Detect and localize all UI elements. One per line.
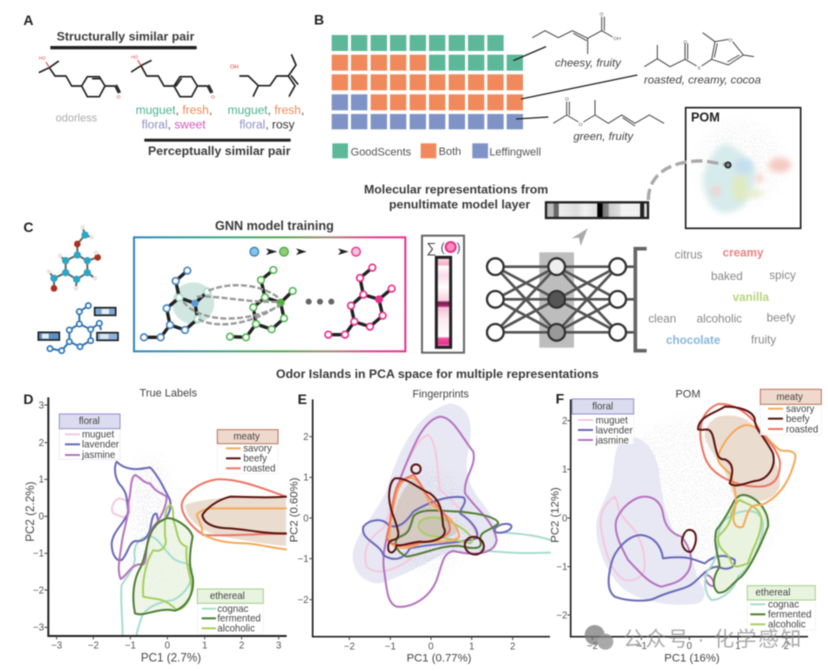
panel F: POM PCA [550,388,821,665]
molecule: rosy: OH [230,64,238,70]
legend [332,143,541,159]
axes: −3 [33,623,44,634]
axes: 0 [687,641,692,652]
axes: −1 [385,641,396,652]
heading: GNN model training: GNN model training [215,219,334,233]
axes [288,399,550,665]
waffle chart [332,35,523,129]
molecule: roasted, creamy, cocoa: S [697,65,701,71]
molecule: green, fruity: O [565,97,569,103]
legend: ethereal [197,589,263,635]
legend: ethereal: ethereal [756,588,790,599]
axes: 1 [202,640,207,651]
molecule: green, fruity: O [579,122,583,128]
panel letter B: B [314,12,324,28]
penultimate layer highlight [539,252,574,348]
legend: meaty: beefy [786,414,810,425]
molecule: muguet fresh floral sweet: O [211,95,215,101]
axes: 1 [469,641,474,652]
odor word cloud: citrus [675,248,703,261]
molecule: odorless: HO [39,55,46,60]
representation vector [546,202,648,218]
heading: structurally similar pair [50,30,197,49]
axes: −1 [298,554,309,565]
axes: PC1 (16%) [664,653,720,665]
axes: 1 [735,641,741,652]
watermark: 公众号 · 化学感知 [623,628,801,651]
upward arrow [572,228,588,246]
legend: ethereal: alcoholic [768,620,806,631]
legend: ethereal: cognac [217,604,249,615]
molecule: muguet fresh floral sweet [131,54,215,101]
axes: PC2 (0.60%) [288,477,300,542]
molecule: rosy [230,55,298,96]
axes: 0 [39,512,44,523]
legend: meaty: savory [786,404,815,415]
legend: ethereal: cognac [768,600,799,611]
axes: 2 [303,432,309,443]
legend: floral: muguet [82,430,115,441]
molecule: cheesy, fruity [532,11,621,54]
label: cheesy, fruity: cheesy, fruity [555,58,622,70]
label: muguet, fresh, floral, rosy [228,103,304,132]
molecule: roasted, creamy, cocoa: O [683,39,687,45]
label: roasted, creamy, cocoa: roasted, creamy, cocoa [644,74,761,86]
chart title: Fingerprints [413,388,469,400]
legend: floral: floral [79,416,100,427]
odor word cloud: clean [648,313,676,326]
heading: structurally similar pair: Structurally similar pair [57,30,195,44]
panel letter D: D [23,391,33,407]
axes: −1 [636,641,647,652]
molecule: odorless: O [117,94,121,100]
axes: 0 [428,641,434,652]
legend: ethereal: fermented [217,614,261,625]
label: green, fruity: green, fruity [573,131,634,143]
odor word cloud: creamy [723,246,764,259]
panel D: true labels PCA [23,388,287,665]
axes: 2 [784,641,789,652]
legend: ethereal: ethereal [210,591,245,602]
molecule: roasted, creamy, cocoa: O [728,38,732,44]
graph 2 [227,267,296,341]
legend: ethereal: fermented [768,610,811,621]
label: muguet, fresh, floral, sweet [136,103,212,132]
readout box: ( [441,241,445,255]
ethereal density [714,495,768,593]
legend: floral [572,399,634,446]
legend: meaty: meaty [777,392,803,403]
molecule: cheesy, fruity: O [600,11,604,17]
molecule: green, fruity [553,97,664,128]
heading: molecular representations: penultimate model layer [389,198,530,212]
ethereal density [420,517,457,537]
legend: ethereal: alcoholic [217,624,255,635]
axes: −2 [33,585,44,596]
axes: −1 [125,640,136,651]
floral density [596,437,705,605]
axes: −2 [88,640,99,651]
legend: meaty: meaty [234,431,260,442]
axes: 2 [562,416,567,427]
chart title: True Labels [140,388,198,400]
odor word cloud: fruity [751,333,776,346]
ethereal density [133,518,193,614]
axes: 2 [510,641,515,652]
panel C: model pipeline [23,219,464,353]
molecule: muguet fresh floral sweet: HO [131,54,138,59]
heading: molecular representations: Molecular representations from [364,182,548,196]
axes: 2 [239,640,244,651]
neural network and odor labels [487,228,796,351]
neighbourhood highlight [172,282,214,324]
odor word cloud [648,246,796,347]
axes: PC1 (2.7%) [141,652,201,665]
axes: PC1 (0.77%) [407,653,472,665]
axes: 3 [276,640,281,651]
axes: 0 [562,513,567,524]
heading: odor islands: Odor Islands in PCA space for multiple representations [276,367,599,381]
meaty density [705,416,780,501]
panel A: structural and perceptual similarity [23,12,304,158]
3D molecule [47,225,101,292]
axes: PC2 (12%) [550,487,562,543]
graph 1 [141,267,211,341]
leader lines [513,47,637,119]
panel letter A: A [23,12,33,28]
axes: −2 [298,595,309,606]
label: odorless: odorless [56,112,98,124]
axes: 3 [39,400,44,411]
legend: floral: lavender [82,440,120,451]
odor word cloud: vanilla [733,291,769,304]
output bracket [635,249,647,351]
network connections [495,267,635,332]
legend: meaty: roasted [786,424,818,435]
scatter points [611,417,778,590]
odor word cloud: chocolate [666,334,721,347]
ellipsis dots [306,299,334,305]
panel letter E: E [298,391,307,407]
heading: molecular representations [364,182,548,212]
legend: Leffingwell [489,146,541,158]
readout box: ) [457,241,461,255]
label: muguet, fresh, floral, sweet: muguet, fresh, [136,103,212,117]
readout box [422,236,464,353]
meaty density [185,496,286,546]
molecule: cheesy, fruity: OH [613,36,621,42]
scatter points [387,470,473,570]
chart title: POM [675,388,701,400]
contours [600,404,795,601]
panel letter C: C [23,219,33,235]
molecule: roasted, creamy, cocoa [644,33,754,71]
POM map panel [686,108,801,228]
axes: −3 [51,640,62,651]
legend: Both [439,146,461,158]
molecular graph with node features [38,303,118,353]
scatter points [130,457,190,610]
floral density [353,403,497,583]
heading: perceptually similar pair: Perceptually similar pair [148,144,291,158]
legend: meaty: roasted [243,464,276,475]
axes: −2 [587,641,598,652]
molecule: odorless [39,55,121,100]
contours [363,417,550,607]
legend: floral [59,414,120,461]
axes: 0 [165,640,170,651]
network nodes [487,258,626,341]
legend: floral: jasmine [595,435,629,446]
dashed arrow to POM [648,161,728,200]
panel letter F: F [556,390,565,406]
POM map panel: POM [691,111,720,125]
axes: 1 [562,465,567,476]
legend: GoodScents [351,147,412,159]
legend: meaty: savory [243,444,272,455]
axes: 1 [39,475,44,486]
legend: floral: floral [592,402,613,413]
axes: −2 [344,641,355,652]
axes: −1 [556,562,567,573]
legend: meaty [217,430,278,475]
axes: 1 [303,473,309,484]
legend: meaty: beefy [243,454,267,465]
graph 3 [325,264,395,338]
axes: −2 [556,610,567,621]
axes: PC2 (2.2%) [24,481,37,542]
axes: −1 [33,549,44,560]
GNN box [134,237,405,351]
legend: floral: jasmine [81,450,115,461]
panel E: fingerprints PCA [288,388,550,665]
odor word cloud: baked [711,270,743,283]
meaty density [390,480,451,545]
axes [24,397,287,665]
legend: floral: muguet [596,415,628,426]
odor word cloud: spicy [769,269,796,282]
contours [112,462,286,636]
odor word cloud: alcoholic [697,313,742,326]
axes [550,399,808,665]
axes: 0 [303,513,309,524]
axes: 2 [39,438,44,449]
node sequence legend [250,247,360,256]
readout box: ∑ [426,240,436,256]
odor word cloud: beefy [767,311,795,324]
panel B: waffle chart and molecules [314,11,801,228]
message passing dashes [183,285,280,324]
legend: floral: lavender [596,425,633,436]
legend: meaty [760,389,821,435]
legend: ethereal [747,586,815,631]
label: muguet, fresh, floral, rosy: floral, rosy [239,118,295,132]
label: muguet, fresh, floral, rosy: muguet, fresh, [228,103,304,117]
label: muguet, fresh, floral, sweet: floral, sweet [142,118,206,132]
selected point [725,162,731,168]
